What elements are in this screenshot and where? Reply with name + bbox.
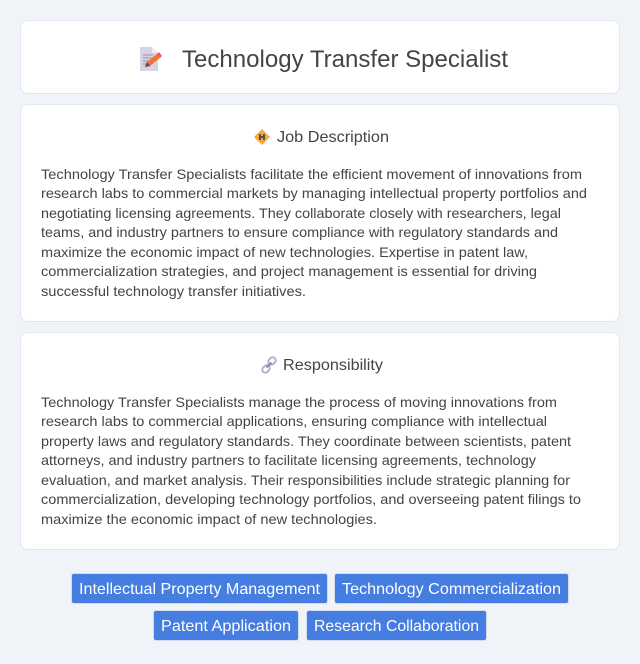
tag: research collaboration: Research Collaboration [314,618,479,635]
tag: intellectual property management: Intellectual Property Management [79,581,321,598]
tag: research collaboration [306,610,487,641]
responsibility text: attorneys, and industry partners to facilitate licensing agreements, technology [41,452,536,468]
panel: job description [20,104,620,322]
tag: intellectual property management [71,573,328,604]
panel: title [20,20,620,94]
job description text: teams, and industry partners to ensure compliance with regulatory standards and [41,224,558,240]
responsibility text: property laws and regulatory standards. They coordinate between scientists, patent [41,433,571,449]
responsibility text: evaluation, and market analysis. Their responsibilities include strategic planning for [41,472,570,488]
job description text: maximize the economic impact of new technologies. Expertise in patent law, [41,244,528,260]
job description text: research labs to commercial markets by managing intellectual property portfolios and [41,185,587,201]
tag: technology commercialization [334,573,569,604]
job description text: Technology Transfer Specialists facilitate the efficient movement of innovations from [41,166,582,182]
icon: chain link [261,356,277,374]
heading: job description: Job Description [277,129,389,146]
responsibility text: commercialization, developing technology portfolios, and overseeing patent filings to [41,491,581,507]
tag: patent application [153,610,299,641]
panel: responsibility [20,332,620,550]
title text: Technology Transfer Specialist [182,46,508,73]
job description text: negotiating licensing agreements. They collaborate closely with researchers, legal [41,205,561,221]
job description text: commercialization strategies, and project management is essential for driving [41,263,537,279]
tag: technology commercialization: Technology Commercialization [342,581,561,598]
responsibility text: Technology Transfer Specialists manage the process of moving innovations from [41,394,557,410]
heading: responsibility: Responsibility [283,357,383,374]
tag: patent application: Patent Application [161,618,291,635]
responsibility text: maximize the economic impact of new technologies. [41,511,377,527]
icon: document with pencil [140,47,162,71]
job description text: successful technology transfer initiatives. [41,283,306,299]
responsibility text: research labs to commercial applications, ensuring compliance with intellectual [41,413,547,429]
job description text [41,166,587,299]
icon: diamond sign [254,129,270,145]
responsibility text [41,394,581,527]
